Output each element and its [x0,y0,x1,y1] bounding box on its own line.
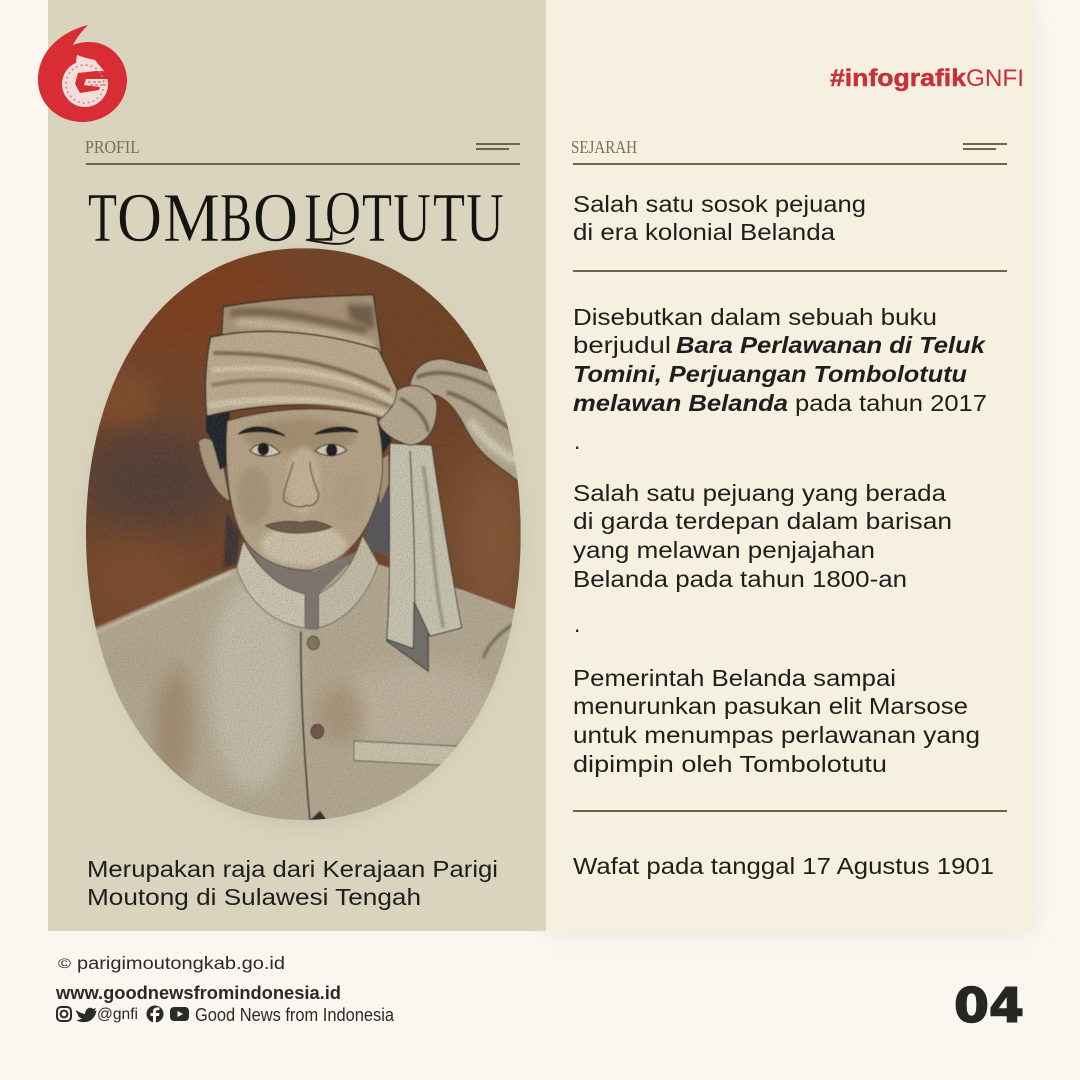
profil caption: Merupakan raja dari Kerajaan Parigi [87,856,498,882]
text block: Marsose: Pemerintah Belanda sampai [573,665,896,691]
text block: frontline: Belanda pada tahun 1800-an [573,566,907,592]
text block: frontline [573,480,952,592]
sejarah heading: SEJARAH [571,137,637,157]
text block: book reference [573,304,987,416]
image credit: © [58,955,72,971]
portrait [77,232,530,827]
text block: Marsose: dipimpin oleh Tombolotutu [573,751,887,777]
page number: 04 [954,979,1024,1034]
hair behind neck [364,490,390,558]
text block: intro: Salah satu sosok pejuang [573,191,866,217]
paint grain [80,240,530,827]
hanging shadow [386,606,430,672]
text block: intro [573,191,866,245]
title: M [163,180,220,257]
text block: Marsose: menurunkan pasukan elit Marsose [573,693,968,719]
text block: death date: Wafat pada tanggal 17 Agustus 1901 [573,853,994,879]
text block: book reference: melawan Belanda [573,390,788,416]
title: O [117,180,162,257]
ear [198,438,230,502]
text block: book reference: Disebutkan dalam sebuah buku [573,304,937,330]
title: U [466,180,504,257]
body [83,564,523,824]
text block: book reference: Bara Perlawanan di Teluk [676,332,986,358]
title [88,180,504,257]
text block: Marsose [573,665,980,777]
hair [206,411,230,470]
panel: right background [546,0,1033,931]
hashtag [830,65,1024,92]
text block: frontline: di garda terdepan dalam barisan [573,508,952,534]
flowing tail [409,358,518,482]
social row [57,1005,395,1025]
profil caption: Moutong di Sulawesi Tengah [87,884,421,910]
hashtag: #infografik [830,65,967,92]
hashtag: GNFI [966,65,1024,92]
title: O [325,180,361,248]
mouth [265,521,332,533]
eyebrows [238,427,285,436]
icon: twitter [76,1008,96,1022]
buttons [307,636,319,650]
handle: @gnfi [97,1006,138,1023]
eyes [250,444,280,456]
title: U [393,180,431,257]
separator dot: . [574,428,580,454]
knot [378,386,437,445]
icon: youtube [170,1007,189,1021]
title: L [304,180,336,257]
separator dot: . [574,611,580,637]
neck shadow [243,541,363,630]
text block: book reference: pada tahun 2017 [795,390,987,416]
icon: facebook [146,1006,164,1023]
text block: book reference: berjudul [573,332,671,358]
placket [301,632,310,822]
title: T [433,180,465,257]
text block: frontline: Salah satu pejuang yang berada [573,480,946,506]
text block: frontline: yang melawan penjajahan [573,537,875,563]
collar [237,541,305,628]
title: B [220,180,252,257]
headband hat top [222,295,382,353]
pocket [354,741,465,766]
profil heading: PROFIL [85,137,140,157]
panel: left background [48,0,546,931]
nose [283,462,319,507]
website url: www.goodnewsfromindonesia.id [55,983,341,1003]
title: T [362,180,392,257]
text block: book reference: Tomini, Perjuangan Tombolotutu [573,361,967,387]
title: O [253,180,298,257]
text block: intro: di era kolonial Belanda [573,219,835,245]
icon: instagram [57,1007,71,1021]
face [226,409,383,571]
hanging tail [387,443,462,649]
portrait shadow [88,254,520,826]
text block: Marsose: untuk menumpas perlawanan yang [573,722,980,748]
title: T [88,180,117,257]
hat band [205,331,402,421]
logo [38,25,127,122]
profil caption [87,856,498,910]
channel name: Good News from Indonesia [195,1005,395,1025]
image credit: parigimoutongkab.go.id [77,953,285,973]
